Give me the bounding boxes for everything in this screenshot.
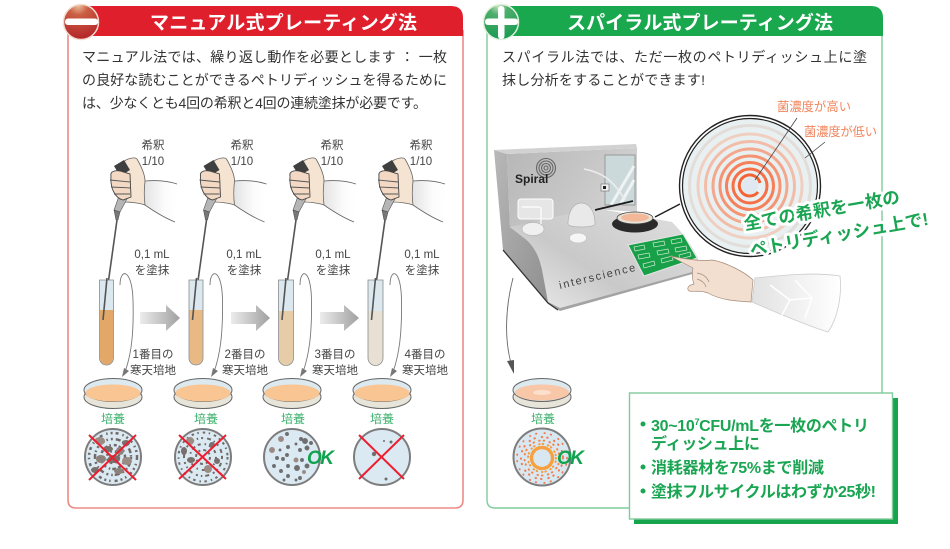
arrow: tube to plate 3 xyxy=(300,274,312,377)
label: high concentration xyxy=(755,99,851,180)
benefit 1: 30~10 xyxy=(651,418,695,435)
heading bar xyxy=(78,6,463,36)
incubation labels xyxy=(101,411,394,426)
intro text xyxy=(502,49,867,88)
intro text: スパイラル法では、ただ一枚のペトリディッシュ上に塗 xyxy=(502,49,867,65)
heading bar: スパイラル式プレーティング法 xyxy=(567,11,833,34)
step 3 dilution xyxy=(278,138,358,377)
label: spread 3: 0,1 mL xyxy=(315,249,351,261)
label: dilution 4: 1/10 xyxy=(410,156,432,168)
icon: spiral logo xyxy=(536,158,556,178)
incubation labels: 培養 xyxy=(194,411,218,426)
benefit 1: ディッシュ上に xyxy=(651,434,760,453)
label: agar 4 xyxy=(402,348,448,377)
label: spread 3: を塗抹 xyxy=(316,264,351,277)
benefit 1: 7 xyxy=(694,417,699,427)
result plate 2: too many colonies xyxy=(175,429,231,485)
label: spread 2 xyxy=(226,249,262,277)
test tube 4 xyxy=(368,278,383,366)
window xyxy=(584,155,635,205)
arrow: machine to dish xyxy=(507,278,514,374)
panel: manual plating method xyxy=(64,4,463,508)
label: low concentration: 菌濃度が低い xyxy=(804,124,877,139)
icon: hand with pipette 1 xyxy=(103,158,177,320)
incubation labels: 培養 xyxy=(101,411,125,426)
result plate 1: too many colonies xyxy=(85,429,141,485)
spiral plater machine xyxy=(494,144,698,311)
label: agar 3: 3番目の xyxy=(315,348,355,361)
machine body xyxy=(494,144,698,311)
heading bar: マニュアル式プレーティング法 xyxy=(150,11,417,34)
label: spread 1: を塗抹 xyxy=(135,264,170,277)
label: spread 4: 0,1 mL xyxy=(404,249,440,261)
label: dilution 4 xyxy=(410,138,433,168)
icon: hand with pipette 4 xyxy=(371,158,445,320)
arrows between dilutions xyxy=(140,305,359,331)
result plate 4: too few colonies xyxy=(354,429,410,485)
label: agar 3 xyxy=(312,348,358,377)
label: dilution 2: 希釈 xyxy=(230,138,254,152)
arrow: tube to plate 4 xyxy=(390,274,402,377)
label: low concentration xyxy=(804,124,877,158)
label: agar 4: 4番目の xyxy=(405,348,445,361)
incubation labels: 培養 xyxy=(281,411,305,426)
control panel xyxy=(628,234,697,276)
heading bar xyxy=(498,6,883,36)
label: agar 3: 寒天培地 xyxy=(312,364,358,377)
label: spread 1: 0,1 mL xyxy=(134,249,170,261)
label: dilution 1 xyxy=(142,138,165,168)
benefit 1 xyxy=(640,416,869,453)
label: dilution 2: 1/10 xyxy=(231,156,253,168)
petri dish with spiral agar xyxy=(513,378,571,408)
panel: spiral plating method xyxy=(484,4,930,524)
intro text: 抹し分析をすることができます! xyxy=(502,72,705,88)
incubation labels: 培養 xyxy=(370,411,394,426)
label: dilution 4: 希釈 xyxy=(410,138,433,152)
dome xyxy=(568,203,595,227)
label: spread 1 xyxy=(134,249,170,277)
pointing hand xyxy=(670,256,840,332)
black arm xyxy=(595,201,633,210)
label: spread 2: を塗抹 xyxy=(227,264,262,277)
slogan xyxy=(742,187,930,260)
label: agar 1: 1番目の xyxy=(133,348,173,361)
benefit 1: CFU/mLを一枚のペトリ xyxy=(699,416,869,435)
label: agar 2: 2番目の xyxy=(225,348,265,361)
dish on turntable xyxy=(612,212,658,232)
result plate 3: countable colonies xyxy=(264,429,335,485)
step 1 dilution xyxy=(100,138,177,377)
arrow: tube to plate 2 xyxy=(210,274,223,377)
incubation label: 培養 xyxy=(531,411,555,426)
brand: interscience: interscience xyxy=(558,262,637,292)
label: dilution 3: 1/10 xyxy=(321,156,343,168)
label: agar 2: 寒天培地 xyxy=(222,364,268,377)
intro text: は、少なくとも4回の希釈と4回の連続塗抹が必要です。 xyxy=(82,95,427,111)
label: dilution 3 xyxy=(320,138,344,168)
panel frame xyxy=(487,30,882,508)
benefit 2: 消耗器材を75%まで削減 xyxy=(651,458,824,477)
connector to magnified plate xyxy=(655,204,680,217)
label: dilution 2 xyxy=(230,138,254,168)
slogan: ペトリディッシュ上で! xyxy=(748,209,930,260)
OK mark: OK xyxy=(307,448,335,469)
intro text xyxy=(82,49,447,111)
icon: hand with pipette 2 xyxy=(192,158,266,320)
arrow: tube to plate 1 xyxy=(120,274,133,377)
label: spread 4 xyxy=(404,249,440,277)
label: agar 4: 寒天培地 xyxy=(402,364,448,377)
label: agar 1: 寒天培地 xyxy=(130,364,176,377)
result plate: spiral colonies xyxy=(514,428,585,486)
callout: benefits xyxy=(630,393,898,524)
left accessories xyxy=(518,199,586,243)
step 2 dilution xyxy=(189,138,268,377)
label: dilution 3: 希釈 xyxy=(320,138,344,152)
label: spread 3 xyxy=(315,249,351,277)
icon: plus badge xyxy=(484,4,518,40)
label: agar 2 xyxy=(222,348,268,377)
label: dilution 1: 希釈 xyxy=(142,138,165,152)
OK mark: OK xyxy=(557,448,585,469)
step 4 dilution xyxy=(368,138,448,377)
slogan: 全ての希釈を一枚の xyxy=(742,187,901,234)
label: high concentration: 菌濃度が高い xyxy=(777,99,851,114)
label: agar 1 xyxy=(130,348,176,377)
icon: hand with pipette 3 xyxy=(282,158,356,320)
intro text: マニュアル法では、繰り返し動作を必要とします ： 一枚 xyxy=(82,49,447,65)
test tube 2 xyxy=(189,278,203,365)
petri dishes with agar xyxy=(84,378,411,408)
benefit 3: 塗抹フルサイクルはわずか25秒! xyxy=(651,483,876,501)
magnified plate: spiral xyxy=(680,116,820,256)
label: spread 4: を塗抹 xyxy=(405,264,440,277)
panel frame xyxy=(68,30,463,508)
label: dilution 1: 1/10 xyxy=(142,156,164,168)
brand: Spiral: Spiral xyxy=(515,172,548,186)
test tube 3 xyxy=(278,278,294,366)
intro text: の良好な読むことができるペトリディッシュを得るために xyxy=(82,72,447,88)
label: spread 2: 0,1 mL xyxy=(226,249,262,261)
icon: minus badge xyxy=(64,4,98,40)
test tube 1 xyxy=(100,278,114,365)
